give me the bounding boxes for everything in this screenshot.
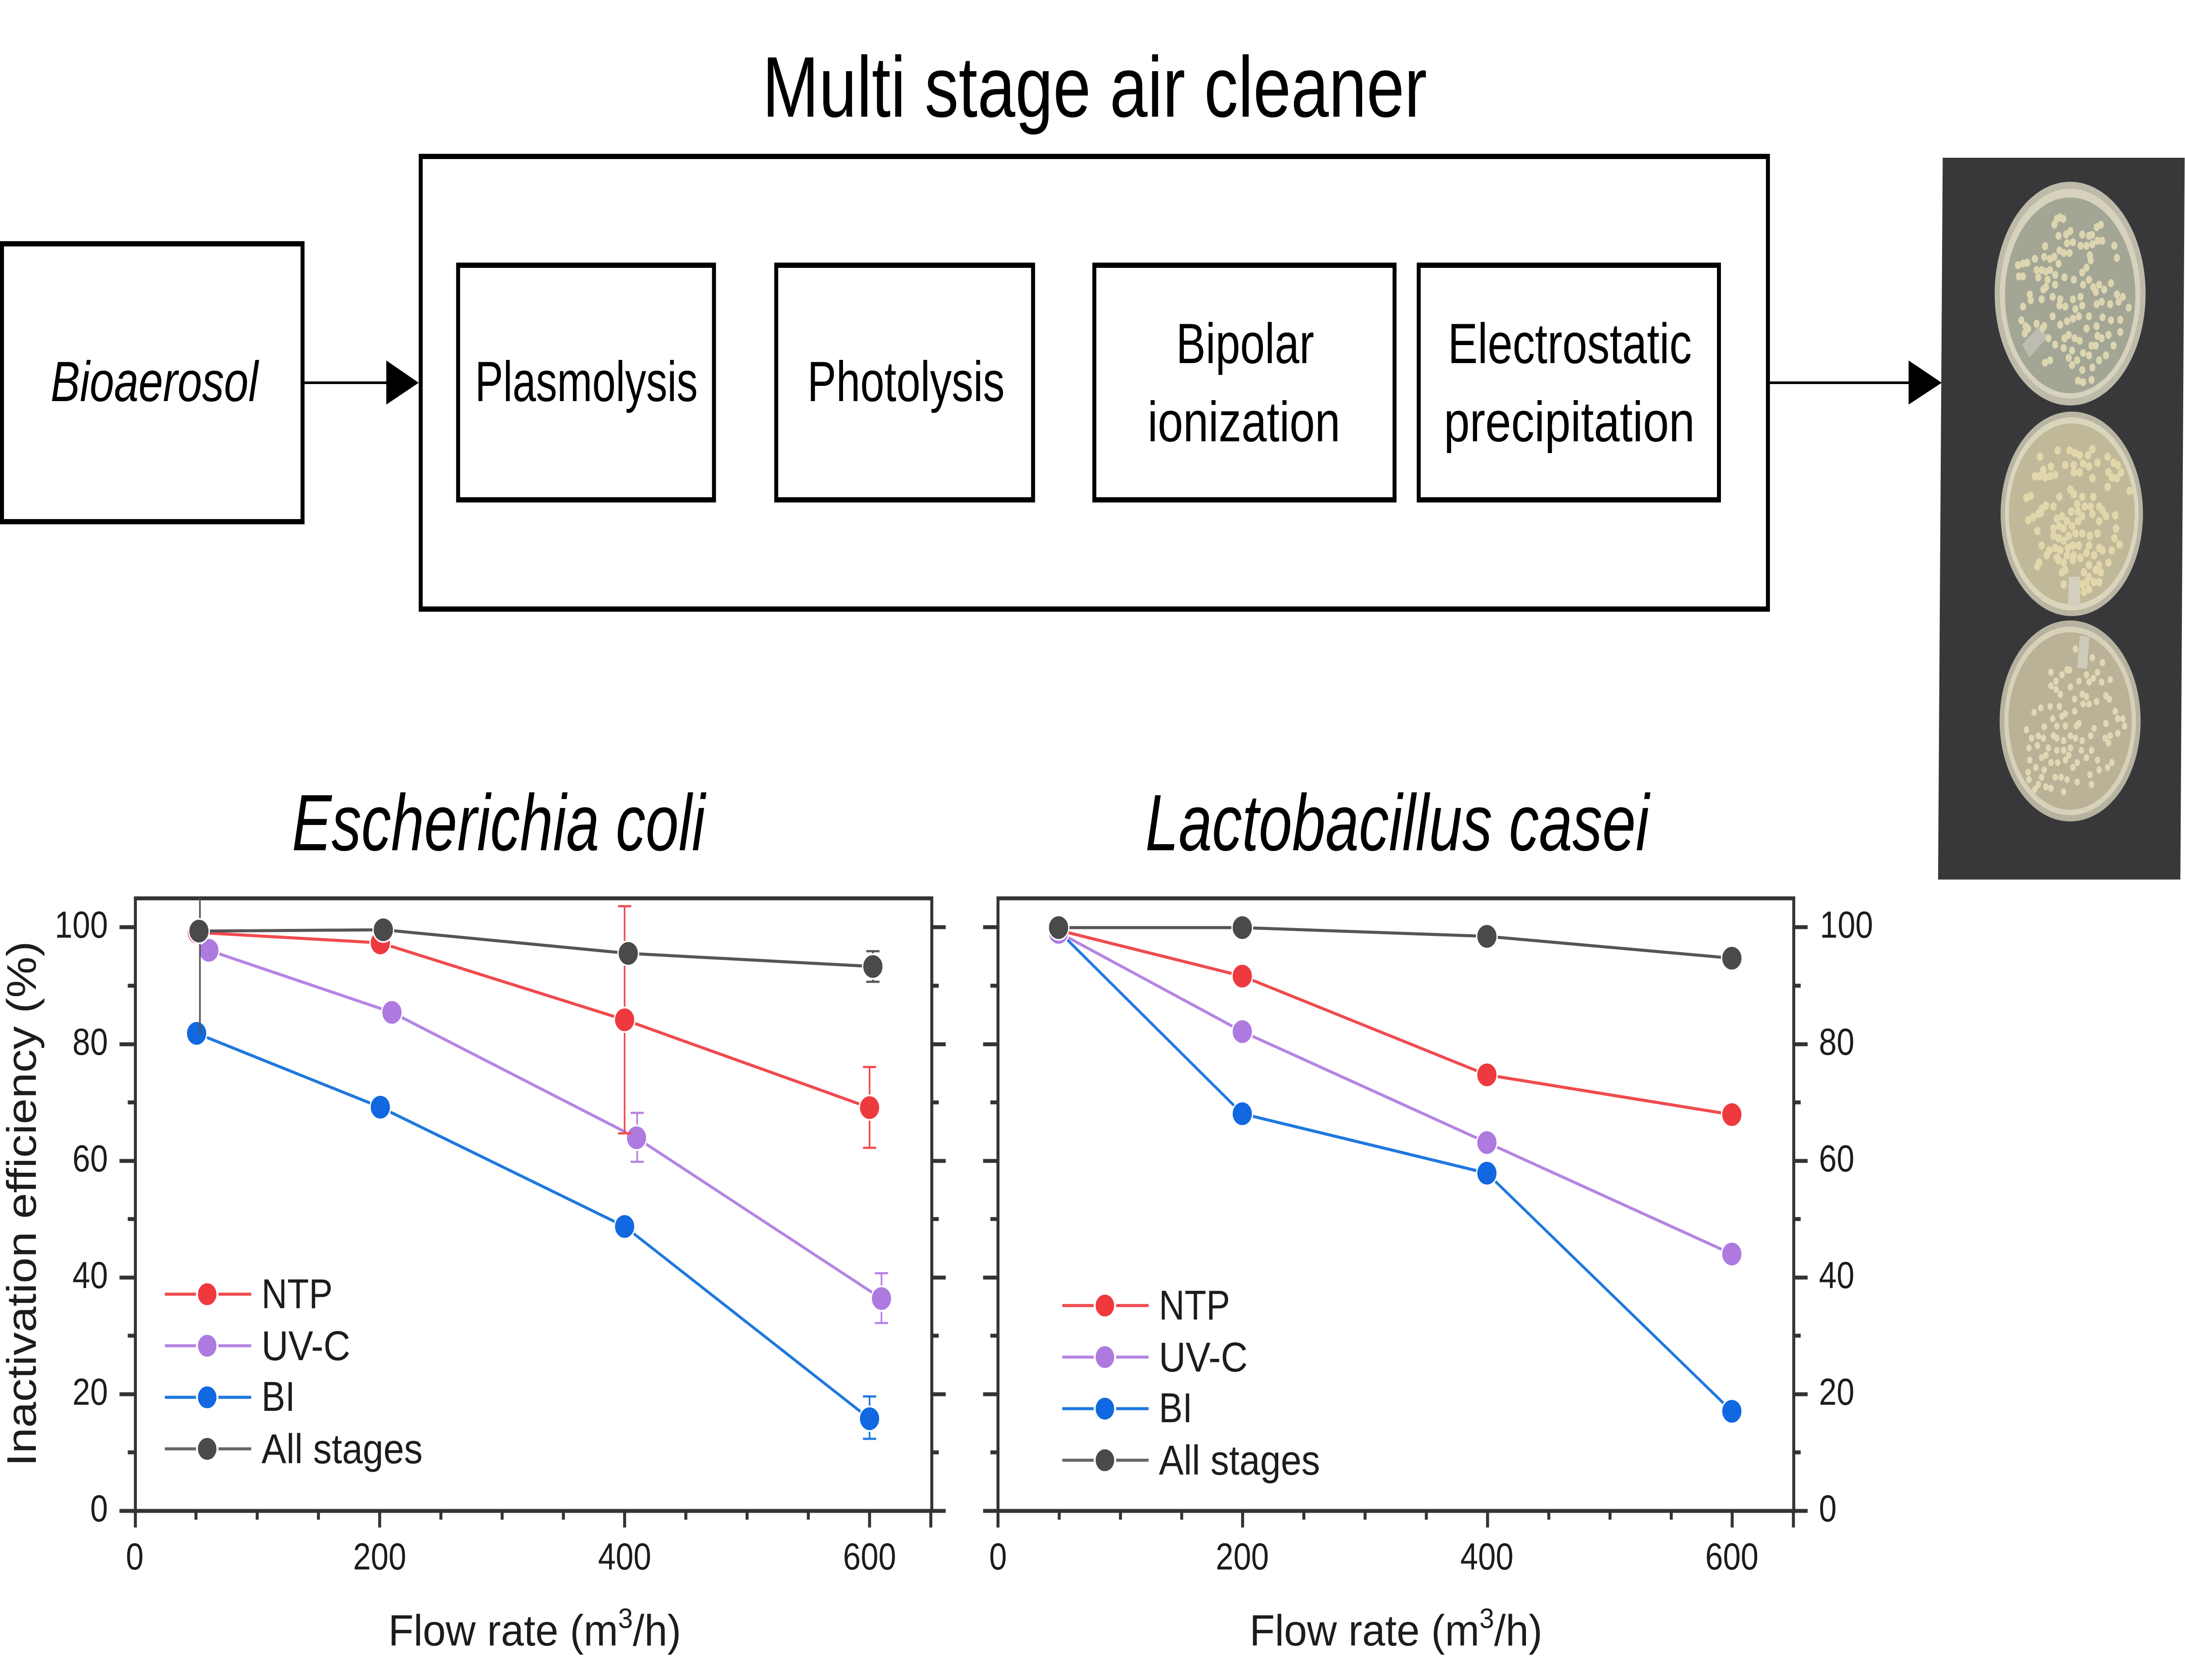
y tick labels: 80 (1819, 1021, 1854, 1063)
panel: multi stage air cleaner housing (421, 156, 1768, 609)
series: NTP (1058, 930, 1742, 1127)
legend: UV-C (1159, 1334, 1248, 1381)
x tick labels: 400 (598, 1535, 651, 1577)
y tick labels: 80 (73, 1021, 108, 1063)
heading: Escherichia coli: Escherichia coli (292, 778, 707, 867)
x axis title: Flow rate (m (388, 1606, 618, 1655)
stage: Plasmolysis: Plasmolysis (475, 350, 698, 413)
stage: Plasmolysis (458, 265, 714, 500)
stage: Photolysis (776, 265, 1033, 500)
arrow: bioaerosol to air cleaner (305, 360, 419, 405)
title: Multi stage air cleaner (762, 39, 1427, 135)
x tick labels: 600 (1705, 1535, 1758, 1577)
legend: All stages (1159, 1437, 1320, 1484)
y tick labels (1819, 904, 1873, 1529)
legend (165, 1270, 423, 1472)
y tick labels: 60 (73, 1137, 108, 1179)
x tick labels: 400 (1460, 1535, 1513, 1577)
legend: BI (1159, 1384, 1193, 1431)
stage: Electrostatic precipitation (1419, 265, 1719, 500)
y tick labels: 20 (73, 1371, 108, 1413)
arrow: air cleaner to culture plates (1770, 360, 1942, 405)
stage: Electrostatic precipitation: Electrostatic (1448, 312, 1692, 375)
series: BI (186, 1021, 880, 1439)
x axis title: 3 (1479, 1604, 1494, 1634)
x tick labels: 600 (843, 1535, 896, 1577)
box: Bioaerosol input: Bioaerosol (51, 350, 260, 413)
x tick labels (989, 1535, 1758, 1577)
y tick labels: 40 (73, 1254, 108, 1296)
chart: Escherichia coli inactivation efficiency (0, 898, 946, 1655)
y tick labels: 60 (1819, 1137, 1854, 1179)
x tick labels: 0 (126, 1535, 144, 1577)
box: Bioaerosol input (2, 244, 302, 522)
x tick labels: 0 (989, 1535, 1007, 1577)
legend (1062, 1282, 1320, 1484)
x axis title: 3 (618, 1604, 633, 1634)
plot frame and ticks (119, 898, 946, 1528)
stage: Bipolar ionization: Bipolar (1176, 312, 1314, 375)
series: UV-C (1048, 920, 1742, 1266)
x axis title: /h) (1494, 1606, 1543, 1655)
x tick labels: 200 (1216, 1535, 1269, 1577)
stage: Bipolar ionization (1094, 265, 1394, 500)
plot frame and ticks (983, 898, 1807, 1528)
plate 3 (2000, 620, 2140, 821)
y tick labels: 40 (1819, 1254, 1854, 1296)
y tick labels: 0 (90, 1487, 108, 1529)
x axis title: /h) (633, 1606, 681, 1655)
x tick labels (126, 1535, 896, 1577)
plate 1 (1994, 182, 2146, 405)
y tick labels (55, 904, 108, 1529)
y tick labels: 20 (1819, 1371, 1854, 1413)
series: UV-C (198, 938, 892, 1323)
stage: Electrostatic precipitation: precipitation (1444, 391, 1695, 454)
legend: BI (261, 1373, 295, 1420)
stage: Photolysis: Photolysis (807, 350, 1005, 413)
legend: NTP (261, 1270, 333, 1317)
colonies (2018, 218, 2130, 792)
x axis title: Flow rate (m (1249, 1606, 1479, 1655)
plate 2 (2001, 412, 2143, 616)
series: All stages (189, 898, 883, 1034)
legend: NTP (1159, 1282, 1230, 1328)
series: NTP (187, 906, 880, 1148)
stage: Bipolar ionization: ionization (1148, 391, 1340, 454)
legend: UV-C (261, 1323, 350, 1369)
photo: three culture plates with colonies (1938, 158, 2185, 880)
series: BI (1058, 931, 1742, 1424)
y tick labels: 100 (55, 904, 108, 946)
legend: All stages (261, 1426, 423, 1472)
chart: Lactobacillus casei inactivation efficiency (983, 898, 1873, 1655)
y tick labels: 100 (1820, 904, 1873, 946)
heading: Lactobacillus casei: Lactobacillus casei (1145, 778, 1651, 867)
x tick labels: 200 (353, 1535, 406, 1577)
series: All stages (1048, 915, 1742, 970)
y axis title: Inactivation efficiency (%) (0, 941, 45, 1466)
y tick labels: 0 (1819, 1487, 1837, 1529)
